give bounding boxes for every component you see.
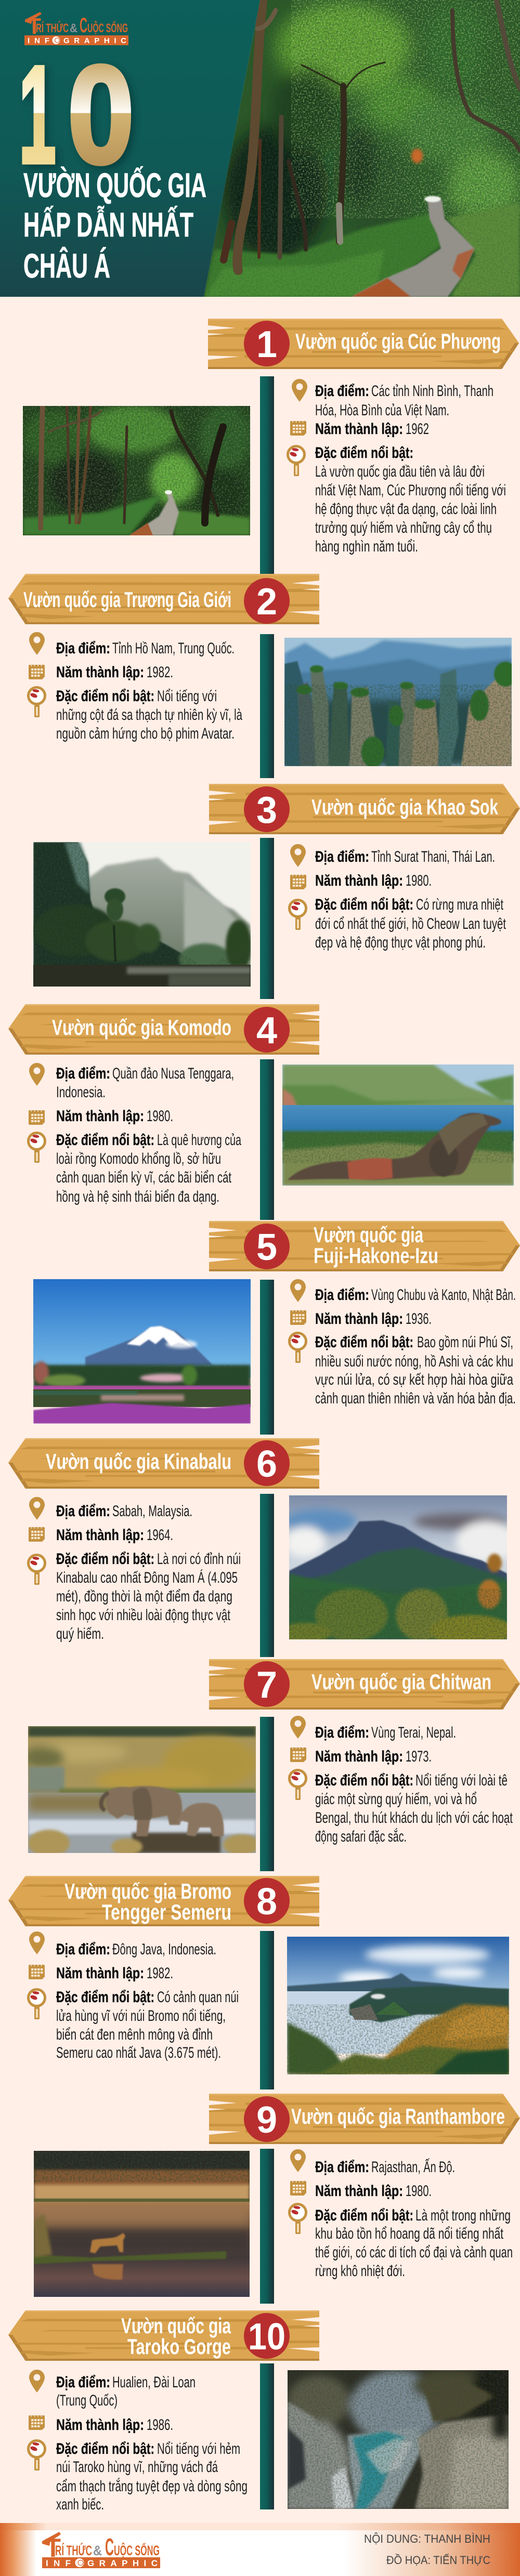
text block [315, 1724, 513, 1845]
text block: Sabah, Malaysia. [112, 1503, 192, 1520]
logo: INF [28, 36, 49, 45]
text block: Indonesia. [56, 1084, 106, 1101]
icon: magnifier [28, 1990, 45, 2019]
text block: Năm thành lập: [56, 2416, 144, 2434]
icon: magnifier [289, 1333, 306, 1363]
logo: RÍ THỨC [36, 21, 69, 35]
text block: Địa điểm: [56, 2374, 110, 2391]
photo: Mount Fuji [33, 1279, 251, 1424]
text block: Năm thành lập: [315, 2183, 403, 2200]
text block: Rajasthan, Ấn Độ. [371, 2158, 455, 2176]
footer logo: GRAPHIC [87, 2558, 158, 2568]
section 7: Chitwan [23, 1659, 520, 1871]
logo: & [70, 21, 77, 35]
text block: cẩm thạch trắng tuyệt đẹp và dòng sông [56, 2478, 248, 2495]
footer logo: UỘC SỐNG [114, 2542, 160, 2558]
sign 1: 1 [256, 324, 277, 365]
logo: UỘC SỐNG [87, 21, 128, 35]
footer [0, 2523, 520, 2576]
text block: 1980. [406, 2183, 432, 2200]
text block [315, 1286, 516, 1407]
photo: Mount Kinabalu [289, 1495, 507, 1639]
text block: Kinabalu cao nhất Đông Nam Á (4.095 [56, 1569, 238, 1586]
text block: Đặc điểm nổi bật: [56, 688, 154, 705]
sign 5: Fuji-Hakone-Izu [314, 1243, 438, 1268]
icon: calendar [29, 1527, 45, 1542]
footer logo: C [105, 2533, 114, 2560]
sign 5: 5 [256, 1227, 277, 1268]
pole [260, 2149, 274, 2304]
icon: calendar [29, 664, 45, 679]
photo: tiger at lake [34, 2151, 250, 2297]
text block: hàng nghìn năm tuổi. [315, 538, 418, 555]
section 5: Fuji-Hakone-Izu [33, 1221, 520, 1435]
title: CHÂU Á [23, 246, 110, 285]
text block [315, 848, 506, 951]
text block: hồng và hệ sinh thái biển đa dạng. [56, 1188, 219, 1205]
sign 7: 7 [256, 1664, 277, 1706]
pole [260, 1280, 274, 1435]
text block: cảnh quan biển kỳ vĩ, các bãi biển cát [56, 1169, 231, 1186]
photo: misty lake [33, 842, 251, 987]
icon: magnifier [28, 2441, 45, 2470]
text block: Có cảnh quan núi [157, 1989, 239, 2006]
text block: Đặc điểm nổi bật: [315, 444, 413, 462]
photo: komodo dragon [282, 1064, 514, 1186]
text block: động safari đặc sắc. [315, 1828, 407, 1845]
title: VƯỜN QUỐC GIA [23, 166, 206, 204]
icon: calendar [29, 1964, 45, 1979]
text block [56, 2374, 248, 2513]
icon: magnifier [289, 2204, 306, 2234]
header banner [0, 0, 520, 297]
text block [315, 383, 506, 555]
text block: Địa điểm: [56, 640, 110, 657]
text block: 1982. [147, 1965, 173, 1982]
sign 10 [8, 2310, 319, 2361]
section 6: Kinabalu [8, 1438, 518, 1657]
teal title panel [0, 0, 260, 297]
big number 10: 1 [19, 36, 56, 192]
icon: magnifier [28, 1133, 45, 1163]
icon: location [292, 379, 307, 402]
sign 7 [209, 1659, 520, 1710]
text block: xanh biếc. [56, 2496, 104, 2513]
text block: Tỉnh Hồ Nam, Trung Quốc. [112, 640, 235, 657]
sign 6: Vườn quốc gia Kinabalu [46, 1449, 231, 1474]
logo [24, 12, 128, 45]
sign 9: 9 [256, 2099, 277, 2141]
text block: lửa hùng vĩ với núi Bromo nổi tiếng, [56, 2007, 226, 2025]
text block: Đặc điểm nổi bật: [56, 2440, 154, 2457]
text block: rừng khô nhiệt đới. [315, 2263, 405, 2280]
text block: Nổi tiếng với [157, 688, 217, 705]
icon: calendar [290, 1747, 306, 1762]
section 1: Cúc Phương [23, 319, 519, 575]
credits [364, 2532, 490, 2567]
text block: 1986. [147, 2416, 173, 2434]
text block: Đặc điểm nổi bật: [315, 1334, 413, 1351]
sign 8: Vườn quốc gia Bromo [64, 1879, 231, 1903]
icon: location [29, 1931, 45, 1954]
icon: calendar [290, 1310, 306, 1325]
icon: calendar [290, 874, 306, 889]
sign 4: 4 [256, 1010, 277, 1052]
footer logo: T [45, 2533, 61, 2562]
sign 10: Vườn quốc gia [121, 2314, 231, 2338]
icon: location [29, 632, 45, 655]
text block: Hualien, Đài Loan [112, 2374, 196, 2391]
logo: C [80, 14, 87, 37]
photo: sandstone pillars [284, 638, 512, 766]
text block: (Trung Quốc) [56, 2392, 118, 2409]
text block: Địa điểm: [56, 1065, 110, 1082]
text block: Semeru cao nhất Java (3.675 mét). [56, 2044, 221, 2061]
photo: elephants [28, 1726, 256, 1853]
text block: 1982. [147, 664, 173, 681]
pole [260, 1059, 274, 1220]
text block: Địa điểm: [315, 1286, 369, 1304]
sign 4: Vườn quốc gia Komodo [52, 1015, 231, 1040]
big number 10: 0 [68, 36, 134, 192]
sign 3: 3 [256, 790, 277, 831]
text block: 1980. [147, 1108, 173, 1125]
sign 1 [208, 319, 519, 369]
sign 10: Taroko Gorge [127, 2334, 231, 2359]
pole [260, 634, 274, 778]
sign 8: 8 [256, 1881, 277, 1923]
section 9: Ranthambore [34, 2094, 520, 2304]
section 8: Bromo Tengger Semeru [8, 1876, 509, 2089]
text block: 1936. [406, 1310, 432, 1328]
text block: biển cát đen mênh mông và đỉnh [56, 2026, 213, 2043]
text block: sinh học với nhiều loài động thực vật [56, 1607, 230, 1624]
section 3: Khao Sok [33, 784, 520, 999]
text block [56, 1065, 241, 1205]
text block [56, 1941, 239, 2061]
text block: Địa điểm: [56, 1503, 110, 1520]
title: HẤP DẪN NHẤT [23, 205, 193, 244]
icon: calendar [290, 2180, 306, 2196]
text block: Đặc điểm nổi bật: [56, 1989, 154, 2006]
icon: calendar [29, 1110, 45, 1125]
icon: calendar [29, 2415, 45, 2430]
photo: forest road [23, 406, 250, 535]
text block: quý hiếm. [56, 1625, 104, 1642]
text block: Năm thành lập: [56, 1527, 144, 1544]
text block: mét), đồng thời là một điểm đa dạng [56, 1588, 232, 1605]
text block: Đặc điểm nổi bật: [56, 1132, 154, 1149]
footer logo [42, 2532, 160, 2568]
icon: location [29, 1063, 45, 1086]
text block: Nổi tiếng với hẻm [157, 2440, 240, 2457]
pole [260, 1717, 274, 1871]
section 2: Trương Gia Giới [8, 574, 517, 778]
title [23, 166, 206, 285]
text block: Địa điểm: [315, 848, 369, 865]
pole [260, 1931, 274, 2089]
text block: Năm thành lập: [56, 1108, 144, 1125]
text block: 1973. [406, 1748, 432, 1765]
text block: Năm thành lập: [315, 872, 403, 889]
text block: Địa điểm: [315, 2159, 369, 2176]
text block: Năm thành lập: [315, 1310, 403, 1328]
sign 8: Tengger Semeru [102, 1900, 231, 1924]
photo: Taroko gorge [288, 2365, 511, 2509]
section 10: Taroko Gorge [8, 2310, 511, 2513]
credits: ĐỒ HỌA: TIẾN THỰC [386, 2554, 490, 2567]
text block: Đông Java, Indonesia. [112, 1941, 216, 1958]
text block: 1962 [406, 420, 429, 438]
icon: calendar [290, 420, 306, 436]
footer logo: INF [46, 2558, 71, 2568]
text block: Năm thành lập: [56, 664, 144, 681]
text block: Năm thành lập: [56, 1965, 144, 1982]
text block: Địa điểm: [315, 1724, 369, 1741]
icon: magnifier [289, 900, 306, 930]
text block: Vùng Terai, Nepal. [371, 1724, 456, 1741]
text block: 1964. [147, 1527, 173, 1544]
sign 10: 10 [248, 2316, 285, 2358]
icon: location [29, 2370, 45, 2393]
text block: những cột đá sa thạch tự nhiên kỳ vĩ, là [56, 706, 242, 724]
icon: magnifier [28, 687, 45, 717]
sign 4 [8, 1004, 319, 1055]
header photo: forest road [198, 0, 520, 297]
icon: magnifier [289, 1770, 306, 1800]
text block: Quần đảo Nusa Tenggara, [112, 1065, 234, 1082]
text block: 1980. [406, 872, 432, 889]
text block: Năm thành lập: [315, 420, 403, 438]
text block: Đặc điểm nổi bật: [56, 1550, 154, 1568]
big number 10 [19, 36, 134, 192]
text block: Đặc điểm nổi bật: [315, 896, 413, 913]
section 4: Komodo [8, 1004, 514, 1220]
sign 3 [209, 784, 520, 834]
text block: Là quê hương của [157, 1132, 241, 1149]
logo: GRAPHIC [63, 36, 126, 45]
footer logo: & [93, 2543, 102, 2558]
icon: location [290, 1716, 306, 1739]
pole [260, 376, 274, 575]
icon: magnifier [288, 446, 305, 476]
icon: location [290, 844, 306, 867]
text block: Hóa, Hòa Bình của Việt Nam. [315, 402, 449, 419]
sign 6 [8, 1438, 319, 1489]
sign 8 [8, 1876, 319, 1926]
text block [315, 2158, 513, 2280]
pole [260, 2363, 274, 2509]
text block: Là nơi có đỉnh núi [157, 1550, 241, 1568]
sign 5 [209, 1221, 520, 1271]
icon: location [29, 1497, 45, 1520]
text block: loài rồng Komodo khổng lồ, sở hữu [56, 1150, 221, 1167]
text block: Năm thành lập: [315, 1748, 403, 1765]
sign 5: Vườn quốc gia [314, 1223, 423, 1247]
text block [56, 1503, 241, 1642]
sign 9 [209, 2094, 520, 2144]
text block: Địa điểm: [56, 1941, 110, 1958]
pole [260, 1494, 274, 1657]
text block: Đặc điểm nổi bật: [315, 1772, 413, 1789]
sign 6: 6 [256, 1443, 277, 1485]
text block: Địa điểm: [315, 383, 369, 400]
icon: magnifier [28, 1555, 45, 1585]
icon: location [290, 2149, 306, 2172]
sign 2 [8, 574, 319, 624]
pole [260, 838, 274, 999]
text block [56, 640, 242, 742]
text block: nguồn cảm hứng cho bộ phim Avatar. [56, 725, 235, 742]
text block: núi Taroko hùng vĩ, những vách đá [56, 2459, 218, 2476]
sign 2: 2 [256, 581, 277, 623]
logo: T [28, 14, 41, 39]
text block: Đặc điểm nổi bật: [315, 2207, 413, 2224]
icon: location [290, 1279, 306, 1302]
footer logo: RÍ THỨC [55, 2542, 92, 2558]
sign 2: Vườn quốc gia Trương Gia Giới [23, 587, 231, 612]
credits: NỘI DUNG: THANH BÌNH [364, 2532, 490, 2545]
photo: Bromo volcano [287, 1937, 509, 2074]
